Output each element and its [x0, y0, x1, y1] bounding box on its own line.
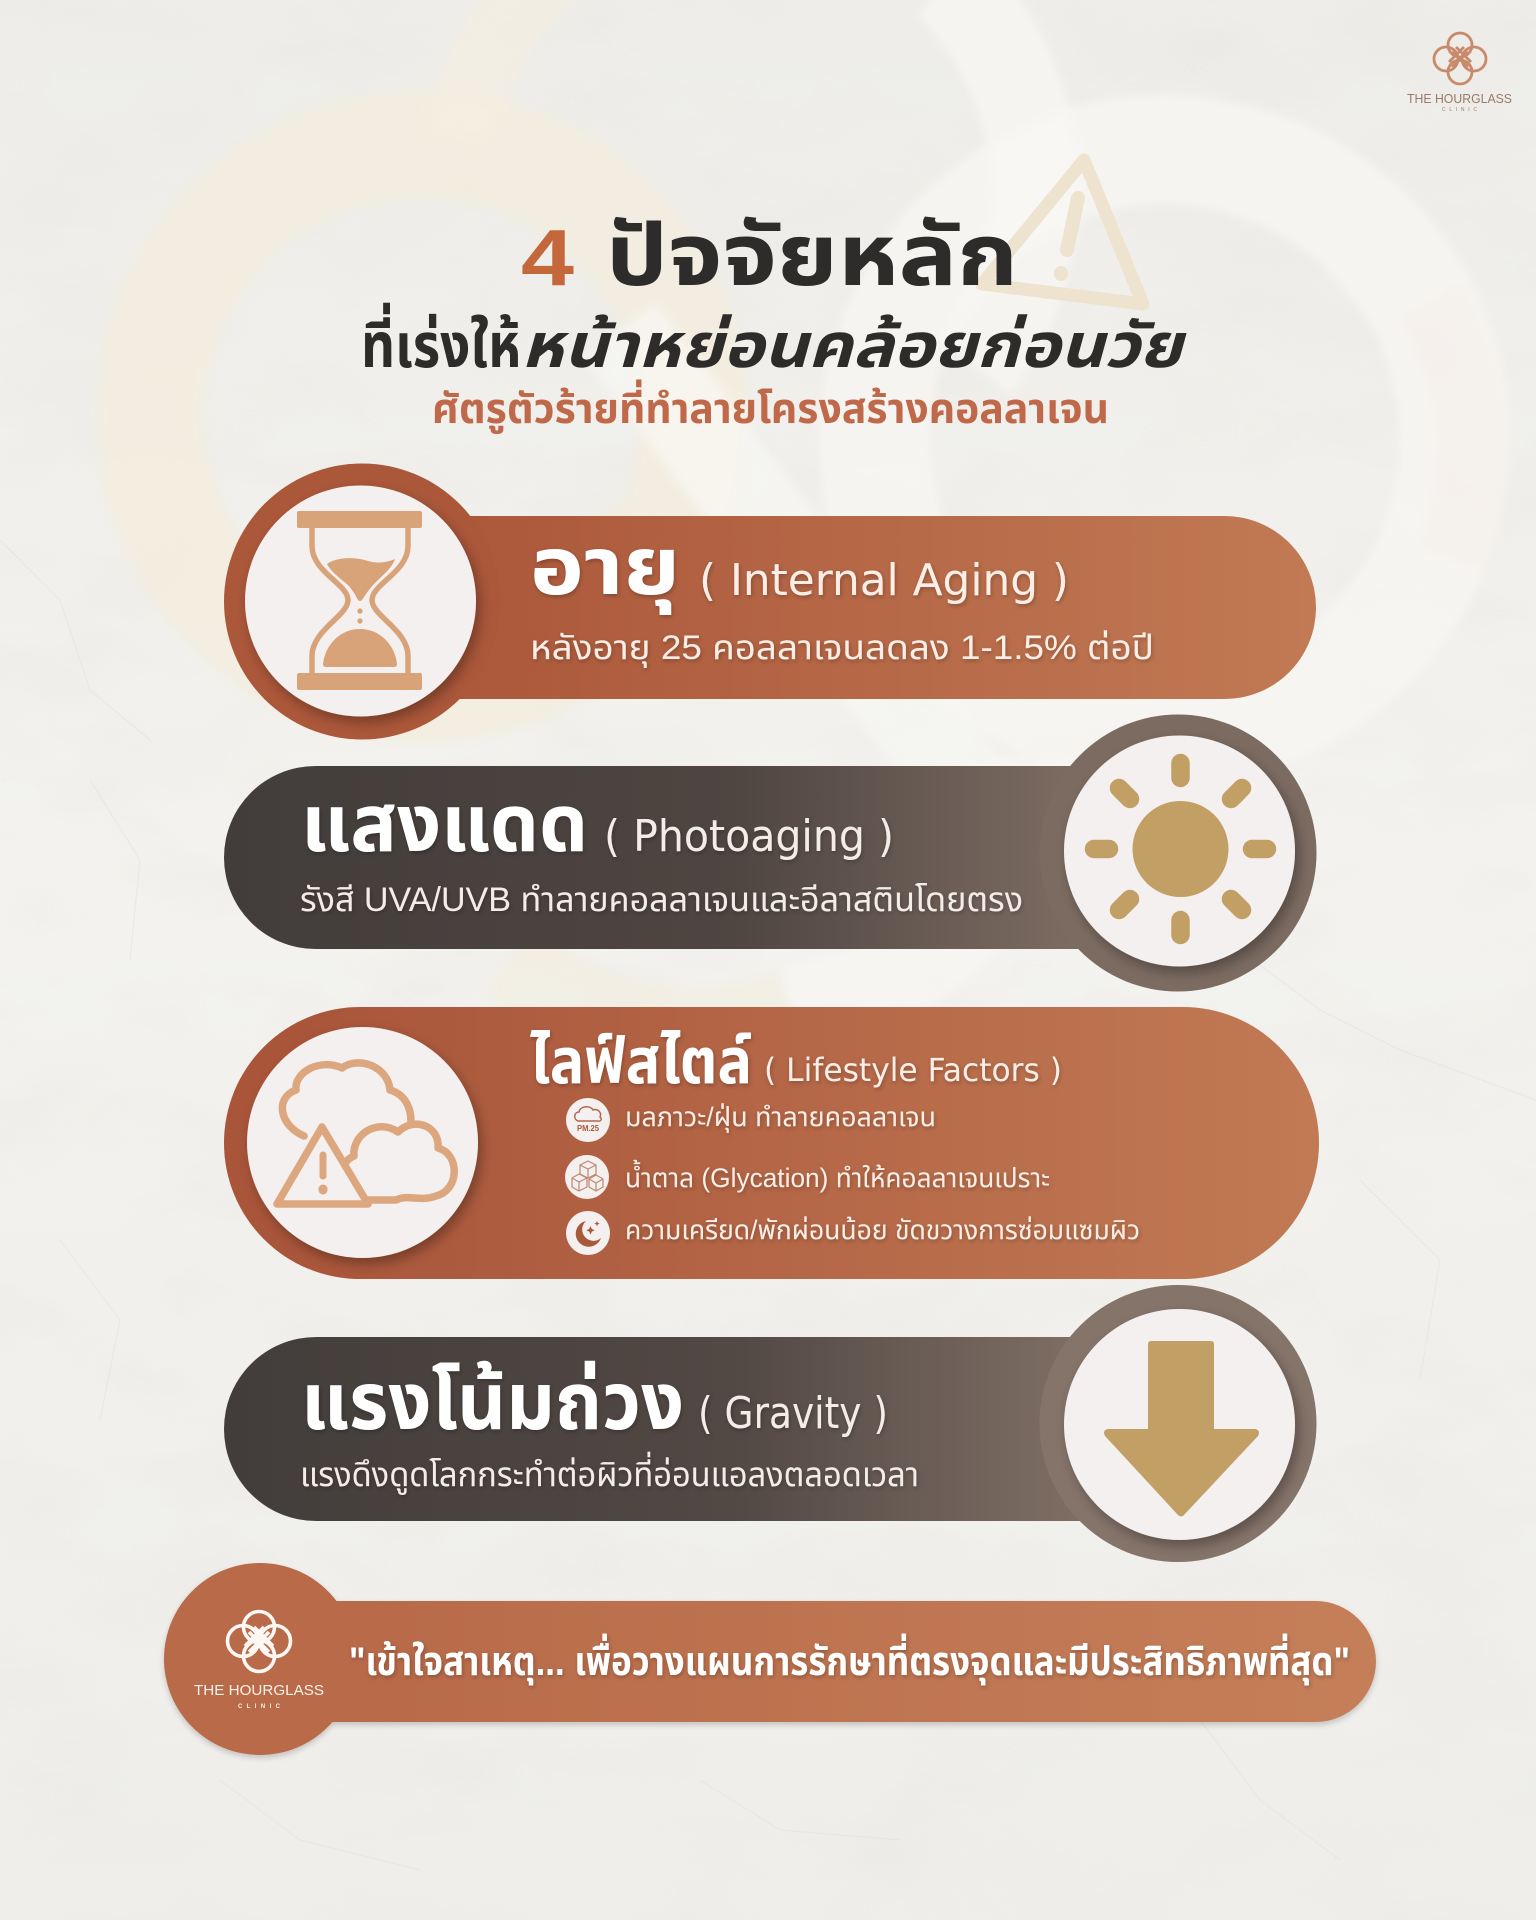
list item: stress: ความเครียด/พักผ่อนน้อย ขัดขวางการซ่อมแซมผิว — [625, 1215, 1140, 1245]
heading: lifestyle: ไลฟ์สไตล์ — [530, 1025, 752, 1097]
footer banner — [164, 1563, 1376, 1755]
title line 1: 4 — [521, 213, 575, 302]
heading: gravity: แรงโน้มถ่วง — [301, 1357, 684, 1446]
icon: down arrow — [1064, 1309, 1295, 1540]
logo: top right — [1407, 33, 1512, 113]
icon: watermark warning triangle — [982, 160, 1143, 304]
panel: age — [224, 464, 1316, 740]
panel shape — [224, 714, 1316, 992]
title line 2: ที่เร่งให้ — [361, 302, 521, 381]
logo: footer: THE HOURGLASS — [194, 1682, 324, 1699]
panel: sunlight — [224, 714, 1316, 992]
footer shape — [164, 1563, 1376, 1755]
panel shape — [224, 1007, 1319, 1279]
title line 2: หน้าหย่อนคล้อยก่อนวัย — [521, 312, 1187, 381]
icon: hourglass — [245, 486, 476, 716]
description: sunlight: รังสี UVA/UVB ทำลายคอลลาเจนและอีลาสตินโดยตรง — [300, 881, 1023, 919]
list item: pollution — [566, 1098, 936, 1142]
background: watermark logo rings — [150, 0, 1471, 1026]
heading: age: ( Internal Aging ) — [699, 555, 1069, 606]
list item: stress — [566, 1211, 1140, 1255]
description: age: หลังอายุ 25 คอลลาเจนลดลง 1-1.5% ต่อปี — [530, 629, 1154, 668]
heading: sunlight — [301, 779, 894, 868]
heading: sunlight: ( Photoaging ) — [604, 811, 894, 862]
icon: sun — [1064, 736, 1295, 966]
title line 1: ปัจจัยหลัก — [606, 208, 1018, 304]
heading: gravity: ( Gravity ) — [698, 1388, 888, 1439]
footer quote: "เข้าใจสาเหตุ... เพื่อวางแผนการรักษาที่ตรงจุดและมีประสิทธิภาพที่สุด" — [349, 1633, 1350, 1686]
icon: moon and star — [566, 1211, 610, 1255]
panel: gravity — [224, 1285, 1316, 1562]
icon: PM2.5 cloud — [566, 1098, 610, 1142]
description: gravity: แรงดึงดูดโลกกระทำต่อผิวที่อ่อนแอลงตลอดเวลา — [300, 1451, 919, 1495]
panel shape — [224, 464, 1316, 740]
title — [361, 208, 1187, 434]
logo: top right: CLINIC — [1442, 107, 1477, 113]
heading: sunlight: แสงแดด — [301, 779, 588, 868]
heading: age: อายุ — [530, 522, 680, 615]
title line 2 — [361, 302, 1187, 381]
logo: top right: THE HOURGLASS — [1407, 91, 1512, 106]
panel: lifestyle — [224, 1007, 1319, 1279]
heading: age — [530, 522, 1069, 615]
subtitle: ศัตรูตัวร้ายที่ทำลายโครงสร้างคอลลาเจน — [432, 379, 1109, 434]
list item: sugar: น้ำตาล (Glycation) ทำให้คอลลาเจนเปราะ — [625, 1159, 1050, 1193]
list item: pollution: มลภาวะ/ฝุ่น ทำลายคอลลาเจน — [625, 1102, 936, 1133]
icon: PM2.5 cloud: PM.25 — [577, 1124, 600, 1133]
panel shape — [224, 1285, 1316, 1562]
icon: sugar cubes — [565, 1155, 609, 1199]
heading: lifestyle: ( Lifestyle Factors ) — [764, 1051, 1062, 1089]
list item: sugar — [565, 1155, 1050, 1199]
heading: gravity — [301, 1357, 888, 1446]
logo: footer: CLINIC — [238, 1704, 281, 1710]
logo: footer — [194, 1612, 324, 1710]
heading: lifestyle — [530, 1025, 1062, 1097]
icon: clouds with warning — [247, 1027, 478, 1258]
